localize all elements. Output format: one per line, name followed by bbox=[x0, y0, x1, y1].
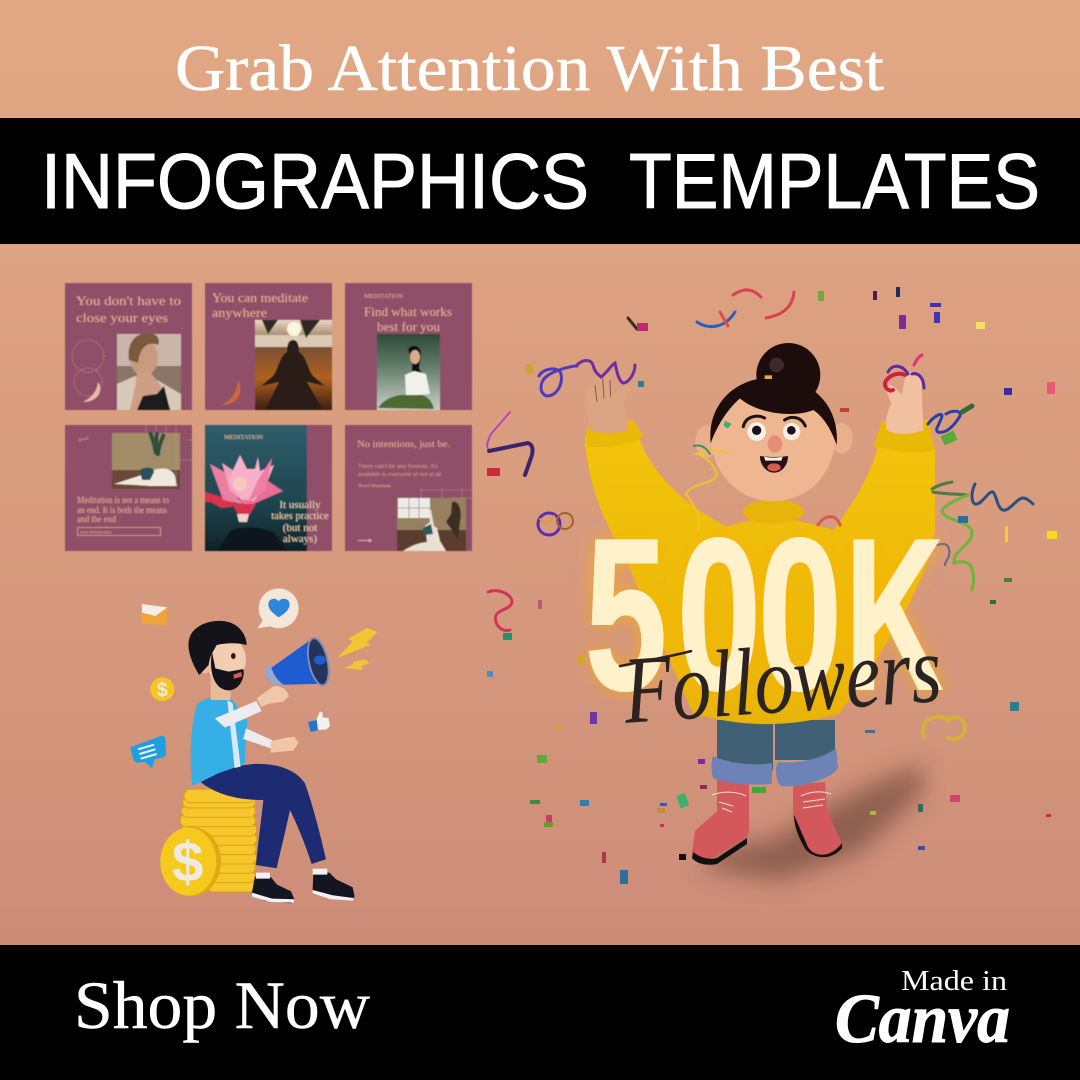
right boot bbox=[793, 782, 842, 858]
panel: lotus, it usually takes practice: (but not bbox=[283, 522, 317, 534]
icon: heart speech bubble bbox=[257, 588, 299, 628]
shirt bbox=[191, 696, 247, 785]
trouser cuffs bbox=[712, 748, 838, 786]
panel: meditation is not a means: JOIN INTENSIVELY bbox=[80, 530, 113, 534]
panel: lotus, it usually takes practice: MEDITATION bbox=[224, 434, 263, 441]
left boot bbox=[692, 778, 749, 865]
large dollar coin bbox=[160, 827, 221, 896]
panel: no intentions, just be: There can't be any formula. It's bbox=[358, 464, 438, 470]
panel: meditation is not a means: and the end bbox=[77, 515, 116, 525]
footer banner bbox=[0, 945, 1080, 1080]
big number: 500K: 5 bbox=[585, 493, 667, 735]
badge: Made in Canva: Made in bbox=[901, 965, 1008, 997]
panel: find what works best for you bbox=[345, 283, 472, 410]
panel: find what works best for you: MEDITATION bbox=[364, 293, 403, 300]
right hand bbox=[886, 372, 923, 434]
character: woman celebrating bbox=[585, 343, 935, 724]
panel: find what works best for you: Find what works bbox=[364, 304, 452, 319]
panel: you can meditate anywhere bbox=[205, 283, 332, 410]
coin stack bbox=[180, 789, 257, 892]
panel: lotus, it usually takes practice: takes practice bbox=[271, 511, 329, 522]
icon: thumbs up bbox=[308, 711, 330, 732]
panel: meditation is not a means: Meditation is not a means to bbox=[77, 496, 169, 506]
panel: you don't have to close your eyes bbox=[65, 283, 192, 410]
head bbox=[188, 621, 247, 700]
gold ribbon bbox=[686, 450, 730, 531]
panel: no intentions, just be: Noel Hanham bbox=[358, 483, 392, 488]
panel: no intentions, just be bbox=[345, 425, 472, 551]
big number: 500K: 0 bbox=[758, 493, 842, 735]
ears bbox=[695, 423, 853, 458]
nose bbox=[768, 435, 782, 453]
icon: lightning bolts bbox=[337, 628, 377, 670]
title banner bbox=[0, 118, 1080, 244]
big number: 500K: 0 bbox=[677, 493, 761, 735]
pants bbox=[198, 764, 326, 868]
panel: lotus, it usually takes practice bbox=[205, 425, 332, 551]
title banner: INFOGRAPHICS bbox=[41, 137, 589, 225]
title banner: TEMPLATES bbox=[629, 137, 1040, 225]
confetti ribbons bbox=[487, 290, 1033, 739]
panel: meditation is not a means: spread bbox=[78, 435, 89, 442]
confetti pieces bbox=[487, 287, 1057, 884]
large dollar coin: $ bbox=[172, 832, 203, 895]
legs and boots bbox=[692, 720, 842, 865]
face bbox=[712, 379, 835, 501]
big number: 500K bbox=[585, 493, 943, 735]
big number: 500K: K bbox=[845, 493, 943, 735]
turtleneck bbox=[743, 500, 804, 524]
mouth bbox=[760, 456, 788, 473]
panel: lotus, it usually takes practice: It usually bbox=[279, 499, 321, 511]
panel: find what works best for you: best for you bbox=[377, 319, 440, 334]
icon: envelope bbox=[141, 604, 167, 625]
hair bbox=[710, 378, 837, 445]
arms and hands bbox=[215, 686, 299, 753]
megaphone bbox=[265, 636, 332, 687]
panel: no intentions, just be: No intentions, just be. bbox=[357, 440, 450, 450]
sweater bbox=[585, 420, 935, 724]
left hand bbox=[585, 374, 630, 433]
illustration: man with megaphone on coin stack bbox=[131, 588, 377, 903]
panel: no intentions, just be: available to everyone or not at all bbox=[358, 472, 441, 478]
sneakers bbox=[252, 869, 355, 903]
panel: meditation is not a means bbox=[65, 425, 192, 551]
icon: dollar coin small: $ bbox=[157, 680, 168, 702]
shadow of character bbox=[700, 764, 922, 880]
call to action: Shop Now: Shop Now bbox=[74, 967, 370, 1043]
panel: meditation is not a means: an end. It is both the means bbox=[77, 506, 167, 516]
script text: Followers: Followers bbox=[619, 615, 945, 744]
panel: you can meditate anywhere: You can meditate bbox=[212, 290, 308, 305]
template grid bbox=[65, 283, 472, 551]
icon: dollar coin small bbox=[150, 677, 174, 702]
eyes bbox=[743, 416, 805, 441]
badge: Made in Canva: Canva bbox=[835, 981, 1010, 1058]
panel: you can meditate anywhere: anywhere bbox=[212, 305, 267, 320]
panel: you don't have to close your eyes: You don't have to bbox=[76, 293, 181, 308]
bun bbox=[756, 343, 820, 407]
sleeve cuffs bbox=[587, 420, 935, 452]
icon: message bubble bbox=[131, 736, 166, 769]
heading: Grab Attention With Best: Grab Attention With Best bbox=[175, 32, 884, 105]
panel: lotus, it usually takes practice: always) bbox=[283, 533, 317, 545]
icon: lotus flower bbox=[205, 455, 283, 522]
panel: you don't have to close your eyes: close your eyes bbox=[76, 310, 168, 325]
